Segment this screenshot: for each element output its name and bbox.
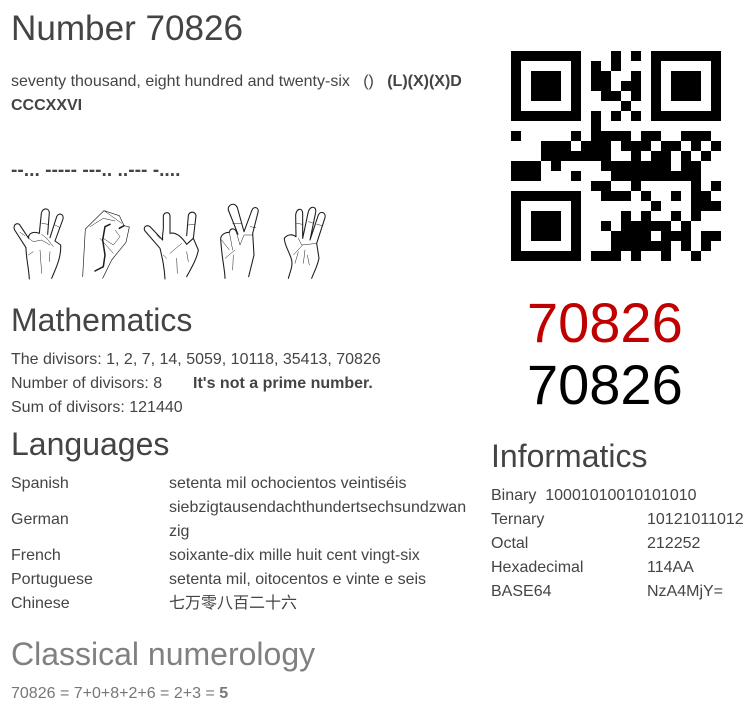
text block: numerology sum: 70826 = 7+0+8+2+6 = 2+3 = 5 [11, 685, 228, 702]
text block: number in words and roman numeral: CCCXXVI [11, 97, 82, 114]
panel: languages table: Portuguese [11, 571, 93, 588]
title: Number 70826 [11, 9, 243, 48]
panel: mathematics facts: It's not a prime number. [193, 375, 373, 392]
big number: red: 70826 [527, 291, 683, 354]
panel: languages table: French [11, 547, 61, 564]
panel: mathematics facts: Number of divisors: 8 [11, 375, 162, 392]
panel: informatics table: 10121011012 [647, 511, 744, 528]
panel: languages table [11, 475, 466, 612]
panel: languages table: 七万零八百二十六 [169, 595, 297, 612]
morse code: --... ----- ---.. ..--- -.... [11, 160, 180, 181]
heading: Classical numerology: Classical numerology [11, 636, 315, 672]
QR code [511, 51, 721, 261]
panel: mathematics facts [11, 351, 381, 416]
icon: sign language hands [14, 204, 326, 280]
panel: informatics table: 114AA [647, 559, 694, 576]
heading: Mathematics: Mathematics [11, 302, 192, 338]
panel: informatics table: BASE64 [491, 583, 551, 600]
panel: informatics table: Binary 10001010010101010 [491, 487, 697, 504]
panel: informatics table: Ternary [491, 511, 544, 528]
icon: hand digit 0 [83, 211, 129, 278]
panel: languages table: setenta mil, oitocentos e vinte e seis [169, 571, 426, 588]
panel: informatics table [491, 487, 744, 600]
icon: hand digit 7 [14, 209, 63, 279]
panel: mathematics facts: The divisors: 1, 2, 7, 14, 5059, 10118, 35413, 70826 [11, 351, 381, 368]
panel: mathematics facts: Sum of divisors: 121440 [11, 399, 183, 416]
panel: languages table: German [11, 511, 69, 528]
text block: number in words and roman numeral [11, 73, 462, 114]
panel: languages table: soixante-dix mille huit cent vingt-six [169, 547, 420, 564]
panel: informatics table: NzA4MjY= [647, 583, 723, 600]
panel: informatics table: 212252 [647, 535, 700, 552]
icon: hand digit 8 [144, 212, 198, 279]
big number: black: 70826 [527, 353, 683, 416]
panel: languages table: setenta mil ochocientos veintiséis [169, 475, 406, 492]
heading: Languages: Languages [11, 426, 169, 462]
text block: number in words and roman numeral: seventy thousand, eight hundred and twenty-six () (L)(X)(X)D [11, 73, 462, 90]
icon: hand digit 2 [221, 204, 258, 278]
heading: Informatics: Informatics [491, 438, 647, 474]
panel: languages table: zig [169, 523, 189, 540]
panel: languages table: siebzigtausendachthundertsechsundzwan [169, 499, 466, 516]
panel: languages table: Chinese [11, 595, 70, 612]
panel: languages table: Spanish [11, 475, 69, 492]
panel: informatics table: Hexadecimal [491, 559, 583, 576]
icon: hand digit 6 [284, 207, 325, 278]
panel: informatics table: Octal [491, 535, 528, 552]
